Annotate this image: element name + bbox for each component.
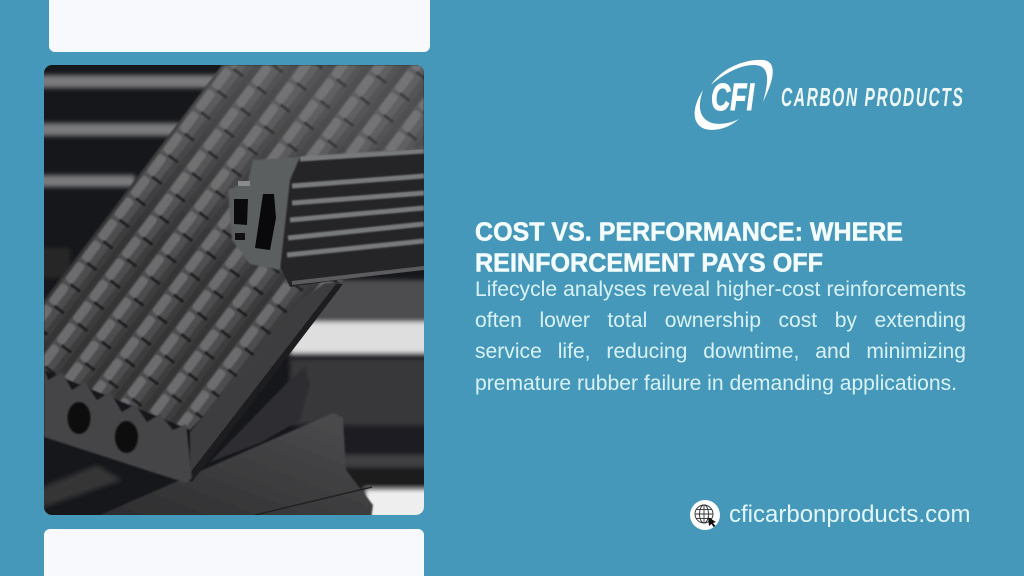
- T-profile bar body: [278, 148, 424, 287]
- top white card: [49, 0, 430, 52]
- lower rubber piece, front: [100, 413, 373, 520]
- logo CFI letters: CFI: [711, 77, 755, 119]
- T-profile ridges: [287, 151, 424, 255]
- body paragraph: Lifecycle analyses reveal higher-cost reinforcements: [475, 278, 966, 301]
- plate front face with zigzag: [44, 367, 192, 483]
- website url: cficarbonproducts.com: [729, 501, 970, 528]
- T-profile end face: [228, 157, 300, 270]
- logo swoosh upper: [711, 60, 773, 102]
- heading: [475, 218, 903, 278]
- plate side edge: [190, 283, 340, 475]
- body paragraph: [475, 278, 966, 395]
- photo: ribbed black rubber profiles: [44, 65, 424, 515]
- bottom white card: [44, 529, 424, 576]
- icon: globe with cursor: [690, 500, 720, 530]
- heading: COST VS. PERFORMANCE: WHERE: [475, 218, 903, 246]
- heading: REINFORCEMENT PAYS OFF: [475, 250, 823, 278]
- body paragraph: often lower total ownership cost by extending: [475, 309, 966, 332]
- body paragraph: service life, reducing downtime, and minimizing: [475, 340, 966, 363]
- blurred background stripes: [30, 75, 440, 519]
- front face holes: [68, 402, 90, 434]
- lower rubber piece, middle: [210, 366, 310, 462]
- logo: CFI Carbon Products: [694, 60, 963, 130]
- ribbed plate top surface: [44, 65, 424, 430]
- logo swoosh lower: [695, 90, 739, 130]
- end face slots: [255, 194, 276, 250]
- logo wordmark: CARBON PRODUCTS: [781, 83, 963, 112]
- body paragraph: premature rubber failure in demanding applications.: [475, 372, 957, 395]
- backdrop: [44, 65, 424, 515]
